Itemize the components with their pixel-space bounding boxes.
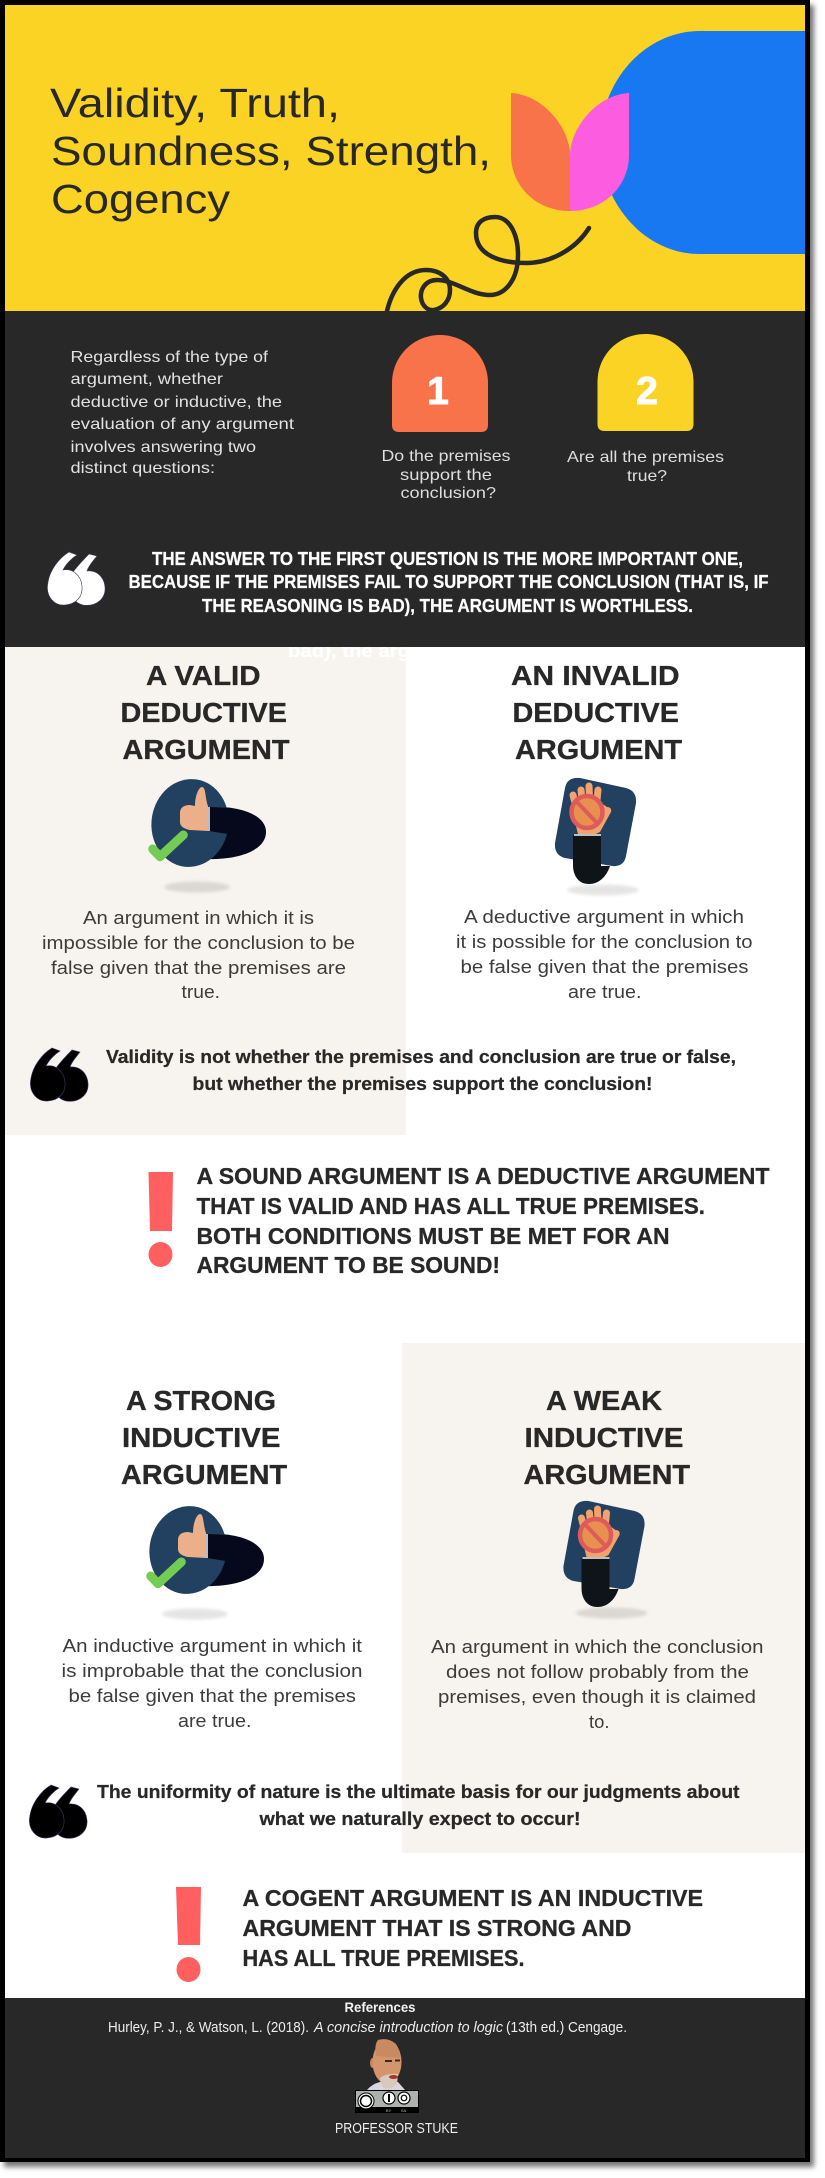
text: invalid definition: be false given that the premises [460,957,748,977]
text: weak definition: does not follow probably from the [446,1662,749,1682]
heading: valid deductive [120,660,290,765]
callout: cogent argument: HAS ALL TRUE PREMISES. [242,1945,524,1971]
quote: uniformity of nature: what we naturally expect to occur! [258,1808,580,1829]
question 1 text [382,448,510,502]
callout: sound argument [196,1163,770,1278]
heading: strong inductive: INDUCTIVE [122,1422,280,1453]
icon: black quotation mark 2 [29,1785,87,1838]
intro text: distinct questions: [70,460,215,477]
callout: sound argument: A SOUND ARGUMENT IS A DEDUCTIVE ARGUMENT [196,1163,770,1189]
title: Soundness, Strength, [51,128,491,174]
icon: black quotation mark [30,1048,88,1101]
question 2 text: Are all the premises [567,449,724,466]
icon: stop hand [555,778,639,896]
panel: header [5,5,805,311]
text: valid definition: An argument in which it is [83,908,314,928]
text: weak definition: An argument in which the conclusion [431,1637,764,1657]
squiggle stem [387,217,589,311]
heading: invalid deductive: AN INVALID [511,660,680,691]
text: strong definition: is improbable that the conclusion [62,1661,362,1681]
heading: weak inductive: INDUCTIVE [524,1422,684,1453]
icon: tulip [511,93,629,211]
panel: footer [5,1998,805,2158]
text: valid definition: true. [182,982,220,1002]
icon: thumbs up with check (strong) [144,1501,264,1620]
blue capsule shape [600,31,805,254]
text: invalid definition [456,907,752,1002]
panel: two questions [5,311,805,647]
quote: uniformity of nature: The uniformity of nature is the ultimate basis for our judgments about [97,1781,740,1802]
heading: weak inductive [524,1385,690,1490]
intro text: argument, whether [70,371,224,388]
badge 1 [392,335,488,432]
question 1 text: support the [400,467,492,484]
heading: invalid deductive: DEDUCTIVE [512,697,679,728]
icon: creative commons badge [355,2090,419,2113]
badge 2: 2 [636,370,658,413]
question 2 text: true? [627,468,667,485]
icon: creative commons badge: BY [386,2108,391,2113]
title: Cogency [51,176,231,222]
text: valid definition: false given that the premises are [51,958,346,978]
quote: first question: THE ANSWER TO THE FIRST QUESTION IS THE MORE IMPORTANT ONE, [152,548,743,569]
author name: PROFESSOR STUKE [335,2120,458,2137]
text: invalid definition: it is possible for the conclusion to [456,932,752,952]
quote: validity: Validity is not whether the premises and conclusion are true or false, [106,1046,736,1067]
intro text: Regardless of the type of [70,349,269,366]
heading: invalid deductive [511,660,682,765]
quote: first question: BECAUSE IF THE PREMISES FAIL TO SUPPORT THE CONCLUSION (THAT IS, IF [128,571,768,592]
heading: strong inductive [121,1385,287,1490]
panel: weak argument background [402,1343,805,1853]
heading: weak inductive: ARGUMENT [524,1459,690,1490]
callout: sound argument: BOTH CONDITIONS MUST BE MET FOR AN [196,1223,670,1249]
text: strong definition [62,1636,362,1731]
intro text: evaluation of any argument [70,416,295,433]
citation [108,2020,627,2036]
text: invalid definition: are true. [568,982,642,1002]
intro text: involves answering two [70,439,256,456]
icon: creative commons badge: SA [401,2108,406,2113]
quote: uniformity of nature [97,1781,740,1829]
references heading: References [344,1999,416,2015]
quote: first question [128,548,768,616]
text: strong definition: An inductive argument in which it [62,1636,362,1656]
heading: valid deductive: DEDUCTIVE [120,697,287,728]
heading: valid deductive: A VALID [146,660,260,691]
badge 2 [598,334,694,431]
text: strong definition: are true. [178,1711,252,1731]
quote: validity: but whether the premises support the conclusion! [192,1073,652,1094]
panel: valid argument background [5,647,406,1135]
text: weak definition: to. [589,1712,610,1732]
citation: (13th ed.) Cengage. [506,2020,627,2036]
icon: thumbs up with check [146,774,266,892]
text: valid definition [42,908,355,1002]
heading: valid deductive: ARGUMENT [122,734,290,765]
callout: sound argument: THAT IS VALID AND HAS ALL TRUE PREMISES. [196,1193,705,1219]
heading: invalid deductive: ARGUMENT [515,734,682,765]
icon: exclamation mark 2 [176,1887,201,1982]
icon: exclamation mark [148,1172,173,1267]
question 1 text: conclusion? [400,485,496,502]
question 2 text [567,449,724,485]
intro text: deductive or inductive, the [70,394,282,411]
text: strong definition: be false given that the premises [68,1686,356,1706]
badge 1: 1 [427,370,449,413]
callout: cogent argument [242,1885,703,1971]
heading: strong inductive: A STRONG [126,1385,276,1416]
icon: white quotation mark [47,552,105,605]
text: weak definition: premises, even though it is claimed [438,1687,756,1707]
callout: sound argument: ARGUMENT TO BE SOUND! [196,1252,500,1278]
title: Validity, Truth, [50,80,340,126]
intro text [70,349,295,477]
question 1 text: Do the premises [382,448,510,465]
text: valid definition: impossible for the conclusion to be [42,933,355,953]
heading: weak inductive: A WEAK [546,1385,662,1416]
heading: strong inductive: ARGUMENT [121,1459,287,1490]
title [50,80,491,222]
stray clipped text: bad), the arg [288,640,410,661]
quote: first question: THE REASONING IS BAD), THE ARGUMENT IS WORTHLESS. [202,595,693,616]
quote: validity [106,1046,736,1094]
text: weak definition [431,1637,764,1732]
callout: cogent argument: ARGUMENT THAT IS STRONG AND [242,1915,632,1941]
icon: professor portrait [367,2039,405,2090]
text: invalid definition: A deductive argument in which [464,907,744,927]
citation: Hurley, P. J., & Watson, L. (2018). [108,2020,309,2036]
icon: stop hand (weak) [563,1501,648,1618]
callout: cogent argument: A COGENT ARGUMENT IS AN INDUCTIVE [242,1885,703,1911]
citation: A concise introduction to logic [313,2020,504,2036]
